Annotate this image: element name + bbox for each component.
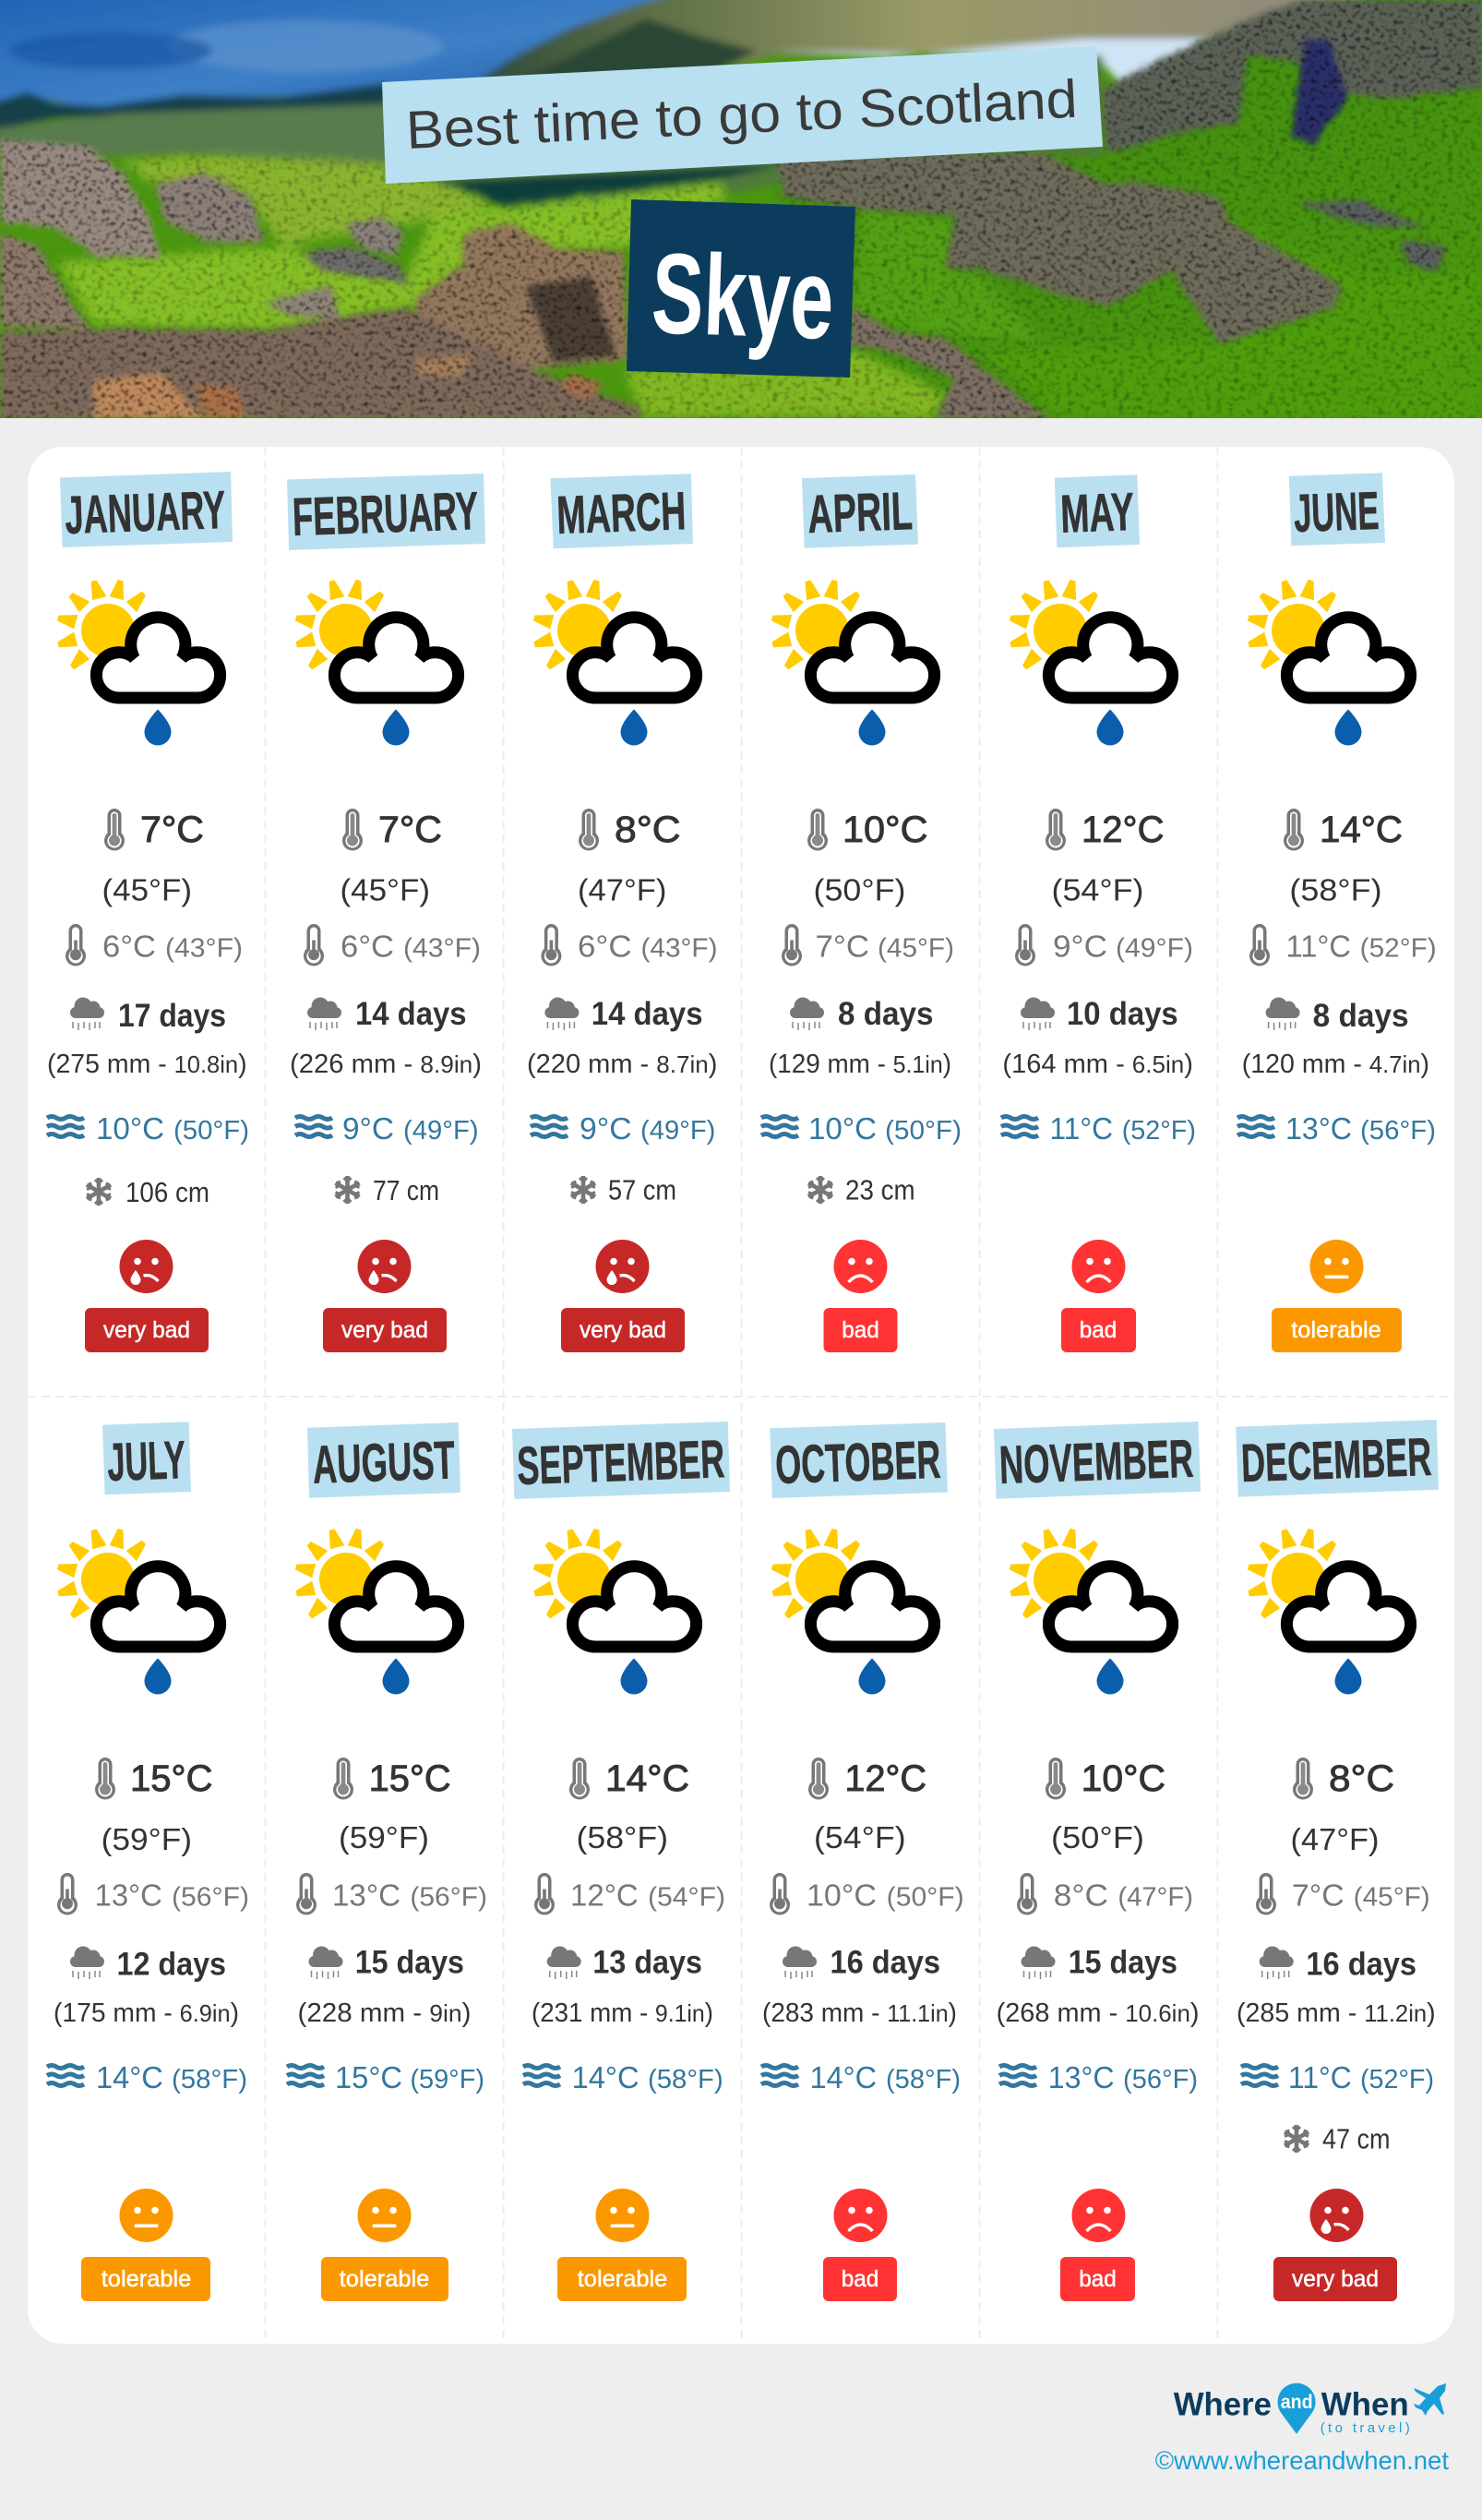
rating face — [358, 2189, 412, 2242]
panel: September — [512, 1422, 730, 2301]
rainy days — [544, 996, 703, 1032]
month label: NOVEMBER — [998, 1429, 1194, 1495]
rainy days — [783, 1944, 940, 1981]
average low temperature: (54°F) — [648, 1883, 725, 1913]
high in Fahrenheit: (59°F) — [339, 1820, 429, 1854]
rating: tolerable: tolerable — [578, 2266, 667, 2292]
rainy days: 8 days — [838, 996, 934, 1032]
sea temperature: (49°F) — [640, 1116, 715, 1146]
average low temperature: (45°F) — [1354, 1883, 1430, 1913]
sea temperature: 13°C — [1048, 2060, 1115, 2094]
rating: very bad — [1273, 2257, 1397, 2301]
snowfall — [571, 1174, 676, 1206]
average high temperature — [104, 809, 204, 851]
rainy days — [1260, 1946, 1416, 1983]
average low temperature — [296, 1873, 487, 1915]
rainy days — [1021, 1944, 1177, 1981]
month label — [287, 474, 485, 550]
sea temperature: (58°F) — [886, 2065, 961, 2094]
rainfall amount: (226 mm - 8.9in) — [290, 1050, 482, 1079]
rainy days: 17 days — [118, 998, 226, 1034]
icon: sun, cloud and rain — [1009, 579, 1173, 746]
high in Fahrenheit: (59°F) — [102, 1822, 192, 1856]
sea temperature: 9°C — [342, 1111, 394, 1146]
panel: May — [1001, 474, 1196, 1352]
logo: Where and When — [1174, 2383, 1446, 2436]
average low temperature — [57, 1873, 249, 1915]
average low temperature: (45°F) — [878, 934, 954, 964]
sea temperature — [531, 1111, 715, 1146]
snowfall — [1285, 2123, 1390, 2154]
average low temperature: (43°F) — [640, 934, 718, 964]
average low temperature: 12°C — [570, 1878, 639, 1913]
sea temperature — [1001, 1111, 1196, 1146]
average high temperature: 8°C — [615, 810, 681, 850]
average high temperature: 12°C — [1082, 810, 1165, 850]
sea temperature: 10°C — [808, 1111, 877, 1146]
rating: tolerable — [321, 2257, 448, 2301]
rating face — [120, 1240, 173, 1293]
snowfall: 106 cm — [125, 1176, 209, 1208]
average low temperature: 8°C — [1054, 1878, 1108, 1913]
average low temperature: (56°F) — [172, 1883, 249, 1913]
rainy days: 15 days — [1069, 1944, 1177, 1981]
icon: sun, cloud and rain — [1247, 579, 1411, 746]
sea temperature: (58°F) — [648, 2065, 723, 2094]
rainfall amount: (275 mm - 10.8in) — [47, 1050, 247, 1079]
rating face — [120, 2189, 173, 2242]
rainy days — [308, 1944, 464, 1981]
average high temperature — [1046, 809, 1165, 851]
sea temperature — [999, 2060, 1198, 2094]
panel: December — [1236, 1420, 1439, 2301]
rating: tolerable: tolerable — [1291, 1317, 1381, 1343]
month label: SEPTEMBER — [516, 1429, 725, 1496]
average low temperature — [1249, 924, 1437, 966]
rating face — [596, 1240, 650, 1293]
location badge: Skye — [627, 199, 855, 378]
average low temperature: (49°F) — [1116, 934, 1193, 964]
sea temperature: 11°C — [1050, 1111, 1113, 1146]
high in Fahrenheit: (45°F) — [340, 873, 430, 906]
month label — [60, 472, 233, 547]
average high temperature: 7°C — [140, 810, 204, 850]
snowfall — [336, 1174, 439, 1206]
average high temperature — [807, 809, 928, 851]
sea temperature: (50°F) — [885, 1116, 962, 1146]
snowfall: 23 cm — [845, 1174, 915, 1206]
rating: bad: bad — [842, 2266, 878, 2292]
month label: MAY — [1059, 482, 1135, 545]
icon: sun, cloud and rain — [532, 579, 697, 746]
average low temperature — [782, 924, 954, 966]
rating: tolerable — [81, 2257, 210, 2301]
average low temperature: 6°C — [102, 929, 156, 964]
average low temperature — [541, 924, 718, 966]
sea temperature: (59°F) — [410, 2065, 484, 2094]
rating: very bad: very bad — [1292, 2266, 1379, 2292]
sea temperature: 14°C — [810, 2060, 877, 2094]
month label: APRIL — [807, 481, 914, 545]
rainy days: 10 days — [1067, 996, 1178, 1032]
rating: very bad — [561, 1308, 685, 1352]
average low temperature: 6°C — [341, 929, 394, 964]
sea temperature — [761, 1111, 962, 1146]
month label: JULY — [106, 1430, 186, 1493]
average high temperature — [95, 1758, 212, 1800]
rainy days: 14 days — [592, 996, 703, 1032]
average low temperature — [534, 1873, 725, 1915]
sea temperature: (52°F) — [1122, 1116, 1196, 1146]
average low temperature — [66, 924, 243, 966]
sea temperature: (56°F) — [1360, 1116, 1436, 1146]
average low temperature: 13°C — [95, 1878, 162, 1913]
rating: tolerable — [1272, 1308, 1402, 1352]
rating: very bad — [85, 1308, 209, 1352]
logo: Where and When: When — [1321, 2387, 1409, 2423]
high in Fahrenheit: (54°F) — [814, 1820, 906, 1854]
rating face — [1310, 2189, 1364, 2242]
high in Fahrenheit: (47°F) — [1290, 1822, 1379, 1856]
rating face — [1310, 1240, 1364, 1293]
month label: FEBRUARY — [292, 481, 479, 547]
panel: July — [47, 1422, 249, 2301]
sea temperature: (50°F) — [173, 1116, 249, 1146]
icon: sun, cloud and rain — [771, 579, 935, 746]
average low temperature: (52°F) — [1360, 934, 1437, 964]
logo: Where and When: (to travel) — [1321, 2420, 1410, 2436]
average low temperature: (43°F) — [165, 934, 243, 964]
average low temperature: 11°C — [1286, 929, 1351, 964]
rainfall amount: (231 mm - 9.1in) — [532, 1998, 713, 2028]
panel: January — [47, 472, 249, 1352]
panel: October — [761, 1422, 964, 2301]
average low temperature — [1017, 1873, 1193, 1915]
rating: bad — [823, 1308, 897, 1352]
average high temperature — [1284, 809, 1403, 851]
rainfall amount: (164 mm - 6.5in) — [1002, 1050, 1193, 1079]
rainfall amount: (228 mm - 9in) — [297, 1998, 472, 2028]
rainfall amount: (285 mm - 11.2in) — [1237, 1998, 1436, 2028]
month label — [512, 1422, 730, 1499]
average high temperature: 14°C — [605, 1758, 689, 1799]
average low temperature: (47°F) — [1117, 1883, 1193, 1913]
sea temperature — [295, 1111, 479, 1146]
month label — [550, 474, 693, 548]
month label — [307, 1422, 460, 1498]
rainfall amount: (129 mm - 5.1in) — [769, 1050, 951, 1079]
sea temperature: 10°C — [96, 1111, 164, 1146]
average high temperature: 8°C — [1329, 1758, 1394, 1799]
average low temperature: (56°F) — [410, 1883, 487, 1913]
average high temperature: 7°C — [378, 810, 442, 850]
sea temperature: (56°F) — [1123, 2065, 1198, 2094]
average low temperature — [770, 1873, 964, 1915]
high in Fahrenheit: (54°F) — [1052, 873, 1144, 906]
rating: very bad: very bad — [341, 1317, 428, 1343]
panel: monthly calendar grid — [28, 447, 1454, 2344]
rainy days — [547, 1944, 702, 1981]
icon: sun, cloud and rain — [56, 579, 221, 746]
rating: bad: bad — [1080, 1317, 1117, 1343]
rating: very bad — [323, 1308, 447, 1352]
average low temperature: 13°C — [332, 1878, 400, 1913]
month label: JANUARY — [64, 480, 226, 546]
rainy days — [1266, 997, 1409, 1034]
month label: OCTOBER — [774, 1430, 941, 1495]
average high temperature — [342, 809, 442, 851]
rating: bad: bad — [842, 1317, 879, 1343]
average low temperature: 6°C — [578, 929, 632, 964]
month label — [770, 1422, 948, 1498]
average low temperature — [304, 924, 481, 966]
rainy days — [307, 996, 467, 1032]
icon: sun, cloud and rain — [294, 1528, 459, 1695]
sea temperature: 15°C — [335, 2060, 402, 2094]
rainy days — [790, 996, 934, 1032]
location badge: Skye: Skye — [650, 230, 836, 364]
month label — [994, 1422, 1201, 1499]
icon: sun, cloud and rain — [1247, 1528, 1411, 1695]
sea temperature — [287, 2060, 484, 2094]
rainy days — [1021, 996, 1178, 1032]
logo: Where and When: and — [1281, 2392, 1313, 2413]
rating: tolerable — [557, 2257, 687, 2301]
average high temperature — [1046, 1758, 1165, 1800]
rainy days — [70, 1946, 226, 1983]
high in Fahrenheit: (50°F) — [814, 873, 906, 906]
average low temperature: 9°C — [1053, 929, 1107, 964]
icon: sun, cloud and rain — [771, 1528, 935, 1695]
average high temperature — [579, 809, 681, 851]
rating: bad — [823, 2257, 897, 2301]
month label: AUGUST — [312, 1430, 456, 1495]
panel: August — [287, 1422, 487, 2301]
rainy days: 14 days — [355, 996, 467, 1032]
rating: bad: bad — [1079, 2266, 1117, 2292]
month label — [1055, 474, 1140, 547]
sea temperature — [1241, 2060, 1434, 2094]
average high temperature: 10°C — [843, 810, 928, 850]
rainfall amount: (120 mm - 4.7in) — [1242, 1050, 1429, 1079]
icon: sun, cloud and rain — [56, 1528, 221, 1695]
average low temperature: 7°C — [1292, 1878, 1345, 1913]
rainy days: 16 days — [1306, 1946, 1416, 1983]
average low temperature — [1015, 924, 1193, 966]
average low temperature: 7°C — [816, 929, 869, 964]
rainfall amount: (220 mm - 8.7in) — [527, 1050, 717, 1079]
sea temperature: (52°F) — [1360, 2065, 1434, 2094]
average high temperature — [569, 1758, 689, 1800]
panel: November — [994, 1422, 1201, 2301]
icon: sun, cloud and rain — [532, 1528, 697, 1695]
month label — [102, 1422, 191, 1494]
sea temperature: (49°F) — [403, 1116, 479, 1146]
panel: February — [287, 474, 485, 1352]
rainy days: 8 days — [1313, 998, 1409, 1034]
rainfall amount: (283 mm - 11.1in) — [762, 1998, 957, 2028]
rating: bad — [1061, 1308, 1136, 1352]
rating face — [1072, 1240, 1126, 1293]
sea temperature — [1237, 1111, 1436, 1146]
rating: very bad: very bad — [103, 1317, 190, 1343]
high in Fahrenheit: (45°F) — [102, 873, 192, 906]
sea temperature: 14°C — [96, 2060, 163, 2094]
average high temperature: 12°C — [844, 1758, 926, 1799]
snowfall: 47 cm — [1322, 2123, 1390, 2154]
rainy days: 16 days — [831, 1944, 940, 1981]
panel: June — [1237, 473, 1437, 1352]
average high temperature — [1293, 1758, 1394, 1800]
month label: MARCH — [556, 481, 687, 546]
high in Fahrenheit: (58°F) — [576, 1820, 668, 1854]
title banner: Best time to go to Scotland — [405, 69, 1079, 161]
average high temperature: 14°C — [1320, 810, 1403, 850]
sea temperature — [761, 2060, 961, 2094]
high in Fahrenheit: (50°F) — [1051, 1820, 1144, 1854]
sea temperature — [47, 2060, 247, 2094]
panel: April — [761, 474, 962, 1352]
average high temperature: 15°C — [369, 1758, 451, 1799]
rating: very bad: very bad — [580, 1317, 666, 1343]
snowfall: 57 cm — [608, 1174, 676, 1206]
rainy days — [70, 997, 226, 1034]
average high temperature — [333, 1758, 451, 1800]
rating face — [1072, 2189, 1126, 2242]
rainy days: 15 days — [355, 1944, 464, 1981]
rating: bad — [1060, 2257, 1135, 2301]
rainy days: 12 days — [116, 1946, 226, 1983]
snowfall: 77 cm — [373, 1174, 439, 1206]
snowfall — [87, 1176, 209, 1208]
hero photo: Skye landscape — [0, 0, 1482, 434]
high in Fahrenheit: (58°F) — [1289, 873, 1382, 906]
sea temperature — [523, 2060, 723, 2094]
rating face — [596, 2189, 650, 2242]
rating face — [834, 2189, 888, 2242]
average low temperature — [1256, 1873, 1430, 1915]
average low temperature: (43°F) — [403, 934, 481, 964]
average high temperature — [808, 1758, 926, 1800]
rating face — [834, 1240, 888, 1293]
rainfall amount: (268 mm - 10.6in) — [997, 1998, 1200, 2028]
snowfall — [808, 1174, 915, 1206]
icon: sun, cloud and rain — [294, 579, 459, 746]
website credit: ©www.whereandwhen.net — [1155, 2446, 1449, 2475]
average low temperature: 10°C — [807, 1878, 877, 1913]
sea temperature: 9°C — [580, 1111, 632, 1146]
sea temperature: 13°C — [1285, 1111, 1352, 1146]
rating: tolerable: tolerable — [340, 2266, 429, 2292]
sea temperature — [47, 1111, 249, 1146]
month label — [802, 474, 918, 548]
sea temperature: (58°F) — [172, 2065, 247, 2094]
rainfall amount: (175 mm - 6.9in) — [54, 1998, 239, 2028]
logo: Where and When: Where — [1174, 2387, 1272, 2423]
icon: sun, cloud and rain — [1009, 1528, 1173, 1695]
sea temperature: 14°C — [572, 2060, 639, 2094]
average low temperature: (50°F) — [887, 1883, 964, 1913]
average high temperature: 10°C — [1082, 1758, 1165, 1799]
rating: tolerable: tolerable — [102, 2266, 191, 2292]
rating face — [358, 1240, 412, 1293]
high in Fahrenheit: (47°F) — [578, 873, 666, 906]
title banner — [382, 46, 1103, 184]
sea temperature: 11°C — [1288, 2060, 1352, 2094]
month label — [1289, 473, 1385, 546]
month label: JUNE — [1293, 481, 1380, 544]
rainy days: 13 days — [592, 1944, 702, 1981]
panel: March — [527, 474, 718, 1352]
average high temperature: 15°C — [130, 1758, 212, 1799]
